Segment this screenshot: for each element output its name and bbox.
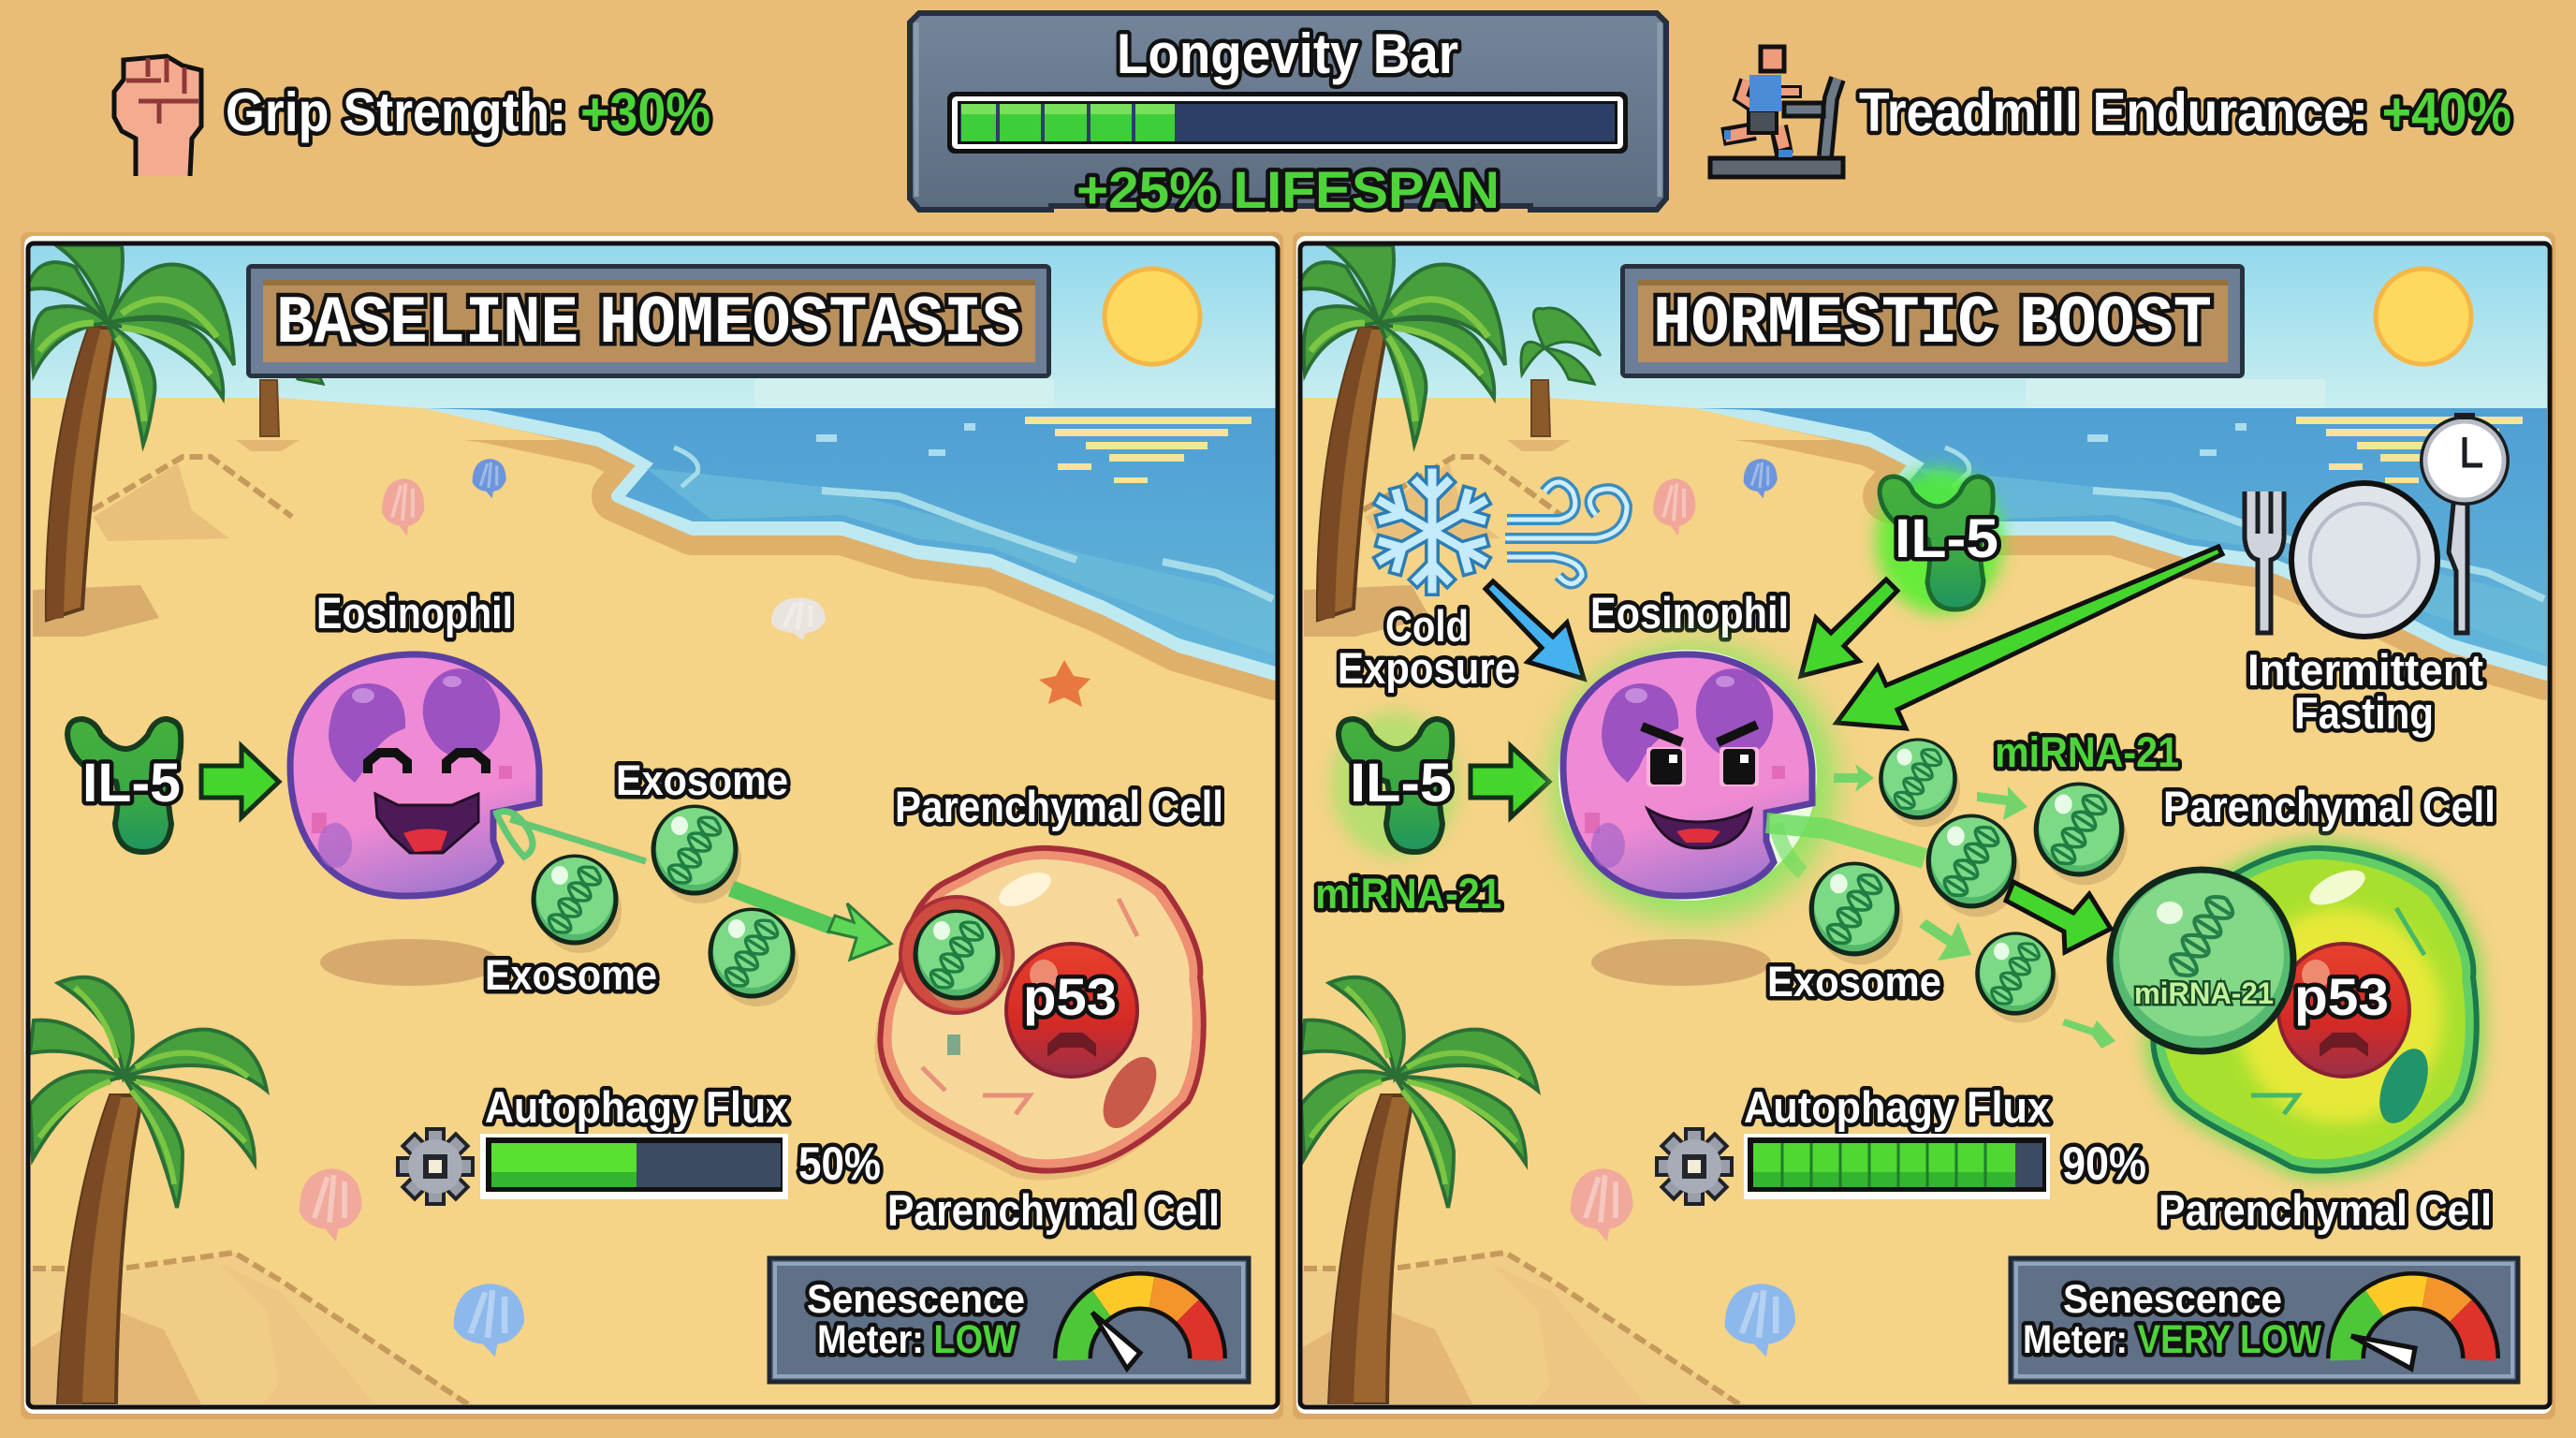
beach scene background (26, 245, 1276, 1404)
arrow: exosome into cell (2006, 882, 2111, 952)
label: mirna-21 top: miRNA-21 (1995, 728, 2179, 776)
il-5 glowing upper (1876, 468, 2003, 614)
exosome b (2036, 785, 2128, 885)
heading: longevity bar: Longevity Bar (1117, 22, 1458, 85)
exosome merged with mirna-21: miRNA-21 (2134, 976, 2274, 1010)
parenchymal cell: boosted (2145, 840, 2484, 1179)
label: parenchymal cell upper: Parenchymal Cell (895, 782, 1223, 831)
text: lifespan gain: +25% LIFESPAN (1076, 160, 1500, 219)
arrow: small stream arrows (1834, 764, 2115, 1049)
autophagy flux meter: 50% (798, 1137, 881, 1190)
label: mirna-21 left: miRNA-21 (1315, 870, 1501, 917)
title plaque: hormetic boost: HORMESTIC (1653, 286, 1996, 362)
il-5 receptor (67, 719, 181, 852)
beach scene background (1297, 245, 2547, 1404)
autophagy flux meter: Autophagy Flux (1744, 1082, 2050, 1132)
autophagy flux meter (398, 1082, 881, 1204)
icon: treadmill runner (1710, 47, 1843, 177)
label: exosome upper: Exosome (616, 756, 788, 804)
icon: starfish (1039, 660, 1090, 707)
senescence meter: very low (2011, 1258, 2518, 1382)
senescence meter: low: Senescence (807, 1277, 1025, 1322)
autophagy flux meter: 90% (2062, 1137, 2146, 1190)
exosome d (1811, 864, 1903, 964)
label: cold exposure: Exposure (1338, 643, 1516, 693)
senescence meter: low (769, 1258, 1249, 1382)
stat: treadmill endurance (1710, 47, 2511, 177)
title plaque: hormetic boost: BOOST (2019, 286, 2212, 362)
label: cold exposure: Cold (1385, 601, 1469, 651)
label: parenchymal cell lower: Parenchymal Cell (2159, 1185, 2492, 1235)
parenchymal cell: baseline: p53 (1023, 967, 1117, 1026)
icon: fasting plate and clock (2245, 413, 2508, 637)
exosome c (1928, 816, 2020, 917)
arrow: activated exosome stream (1766, 823, 1925, 873)
title plaque: hormetic boost (1620, 264, 2245, 378)
arrow: fasting to eosinophil (1837, 547, 2222, 728)
label: exosome lower: Exosome (485, 951, 657, 999)
stat: grip strength (114, 56, 710, 176)
exosome a (1881, 741, 1960, 827)
il-5 receptor left: IL-5 (1350, 753, 1452, 814)
title plaque: baseline homeostasis: HOMEOSTASIS (599, 286, 1020, 362)
icon: fist (114, 56, 201, 176)
icon: white shell (771, 597, 826, 640)
progress bar: lifespan (947, 92, 1628, 154)
il-5 receptor left (1331, 712, 1458, 858)
senescence meter: low: Meter: LOW (817, 1317, 1017, 1362)
label: eosinophil: Eosinophil (1590, 588, 1789, 638)
icon: snowflake (1382, 473, 1483, 589)
autophagy flux meter (1657, 1082, 2146, 1204)
label: intermittent fasting: Intermittent (2247, 645, 2483, 695)
exosome upper (653, 807, 741, 903)
panel: hormetic boost (1293, 232, 2555, 1419)
exosome lower right (710, 910, 798, 1006)
arrow: il-5 to eosinophil (1801, 580, 1897, 676)
eosinophil: activated (1551, 644, 1836, 921)
label: eosinophil: Eosinophil (316, 588, 513, 638)
arrow: cold to eosinophil (1486, 581, 1584, 679)
exosome lower left (534, 857, 622, 953)
label: p53: p53 (2294, 967, 2389, 1026)
senescence meter: very low: Senescence (2063, 1277, 2282, 1322)
il-5 receptor: IL-5 (82, 753, 181, 814)
autophagy flux meter: Autophagy Flux (485, 1082, 788, 1132)
icon: wind (1505, 482, 1627, 584)
exosome merged with mirna-21 (2110, 870, 2293, 1051)
panel: baseline homeostasis (21, 232, 1283, 1419)
arrow: exosome stream (494, 812, 891, 960)
parenchymal cell: baseline (874, 848, 1204, 1180)
panel: longevity bar (910, 13, 1666, 219)
text: treadmill endurance +40%: Treadmill Endurance: +40% (1859, 81, 2511, 143)
exosome e (1978, 934, 2058, 1022)
title plaque: baseline homeostasis: BASELINE (276, 286, 578, 362)
il-5 glowing upper: IL-5 (1895, 508, 1998, 569)
label: intermittent fasting: Fasting (2294, 688, 2434, 738)
text: grip strength +30%: Grip Strength: +30% (226, 81, 710, 143)
label: exosome: Exosome (1767, 958, 1941, 1005)
arrow: il-5 to eosinophil (201, 746, 279, 817)
label: parenchymal cell lower: Parenchymal Cell (887, 1185, 1220, 1235)
label: parenchymal cell upper: Parenchymal Cell (2163, 782, 2496, 831)
arrow: il-5 to eosinophil left (1471, 746, 1549, 817)
eosinophil: happy (290, 654, 539, 896)
title plaque: baseline homeostasis (246, 264, 1051, 378)
senescence meter: very low: Meter: VERY LOW (2023, 1317, 2321, 1362)
